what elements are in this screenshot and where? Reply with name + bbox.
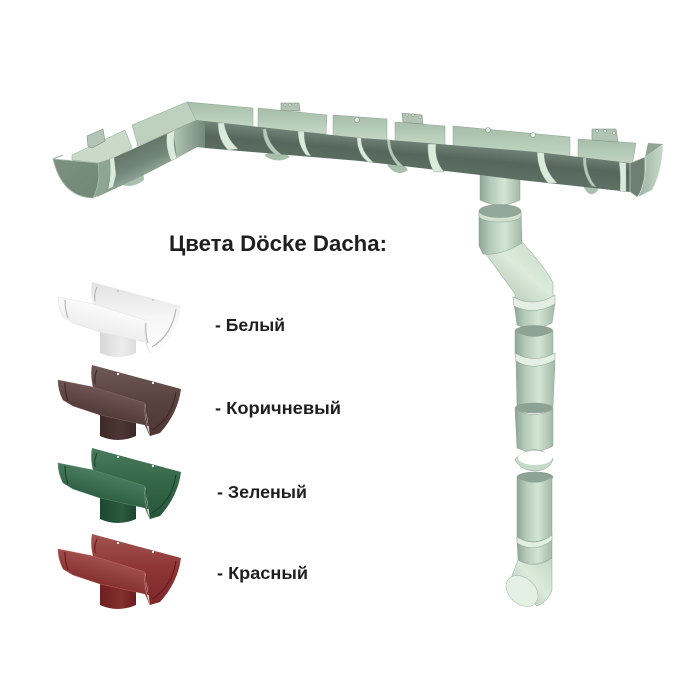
bottom outlet <box>500 569 544 613</box>
outlet stub <box>480 168 520 205</box>
right end strip <box>630 157 645 197</box>
title: Цвета Döcke Dacha: <box>169 231 387 256</box>
drain pipe <box>479 168 555 613</box>
swatch: green gutter outlet <box>58 448 181 523</box>
label: red: - Красный <box>217 563 308 583</box>
gutter right end cap <box>638 144 663 197</box>
label: green: - Зеленый <box>217 482 307 502</box>
swatch: brown gutter outlet <box>58 365 181 440</box>
bottom elbow <box>510 558 552 606</box>
gutter body, corner shading <box>173 120 205 158</box>
gutter left end cap <box>53 159 99 198</box>
label: brown: - Коричневый <box>215 398 341 418</box>
gutter body, long run <box>205 121 630 192</box>
left tip <box>53 155 63 159</box>
gutter system assembly <box>53 102 663 613</box>
coupling after elbow <box>514 303 555 328</box>
upper coupling <box>479 211 522 254</box>
long pipe <box>517 472 553 482</box>
pipe segment 1 <box>515 326 553 336</box>
swatch: red gutter outlet <box>58 534 181 609</box>
hanger bumps under the gutter <box>115 148 598 194</box>
gutter body, left run <box>97 120 197 197</box>
label: white: - Белый <box>215 315 285 335</box>
mounting brackets <box>87 103 618 148</box>
left end strip <box>93 159 110 198</box>
gutter light bands <box>108 123 626 192</box>
bottom coupling <box>517 537 552 564</box>
gutter back wall <box>72 102 636 166</box>
right end inner wall <box>645 143 663 157</box>
open ring <box>515 450 553 471</box>
swatch: white gutter outlet <box>58 282 181 357</box>
pipe segment 2 <box>515 403 553 413</box>
lower elbow diagonal <box>483 242 553 303</box>
